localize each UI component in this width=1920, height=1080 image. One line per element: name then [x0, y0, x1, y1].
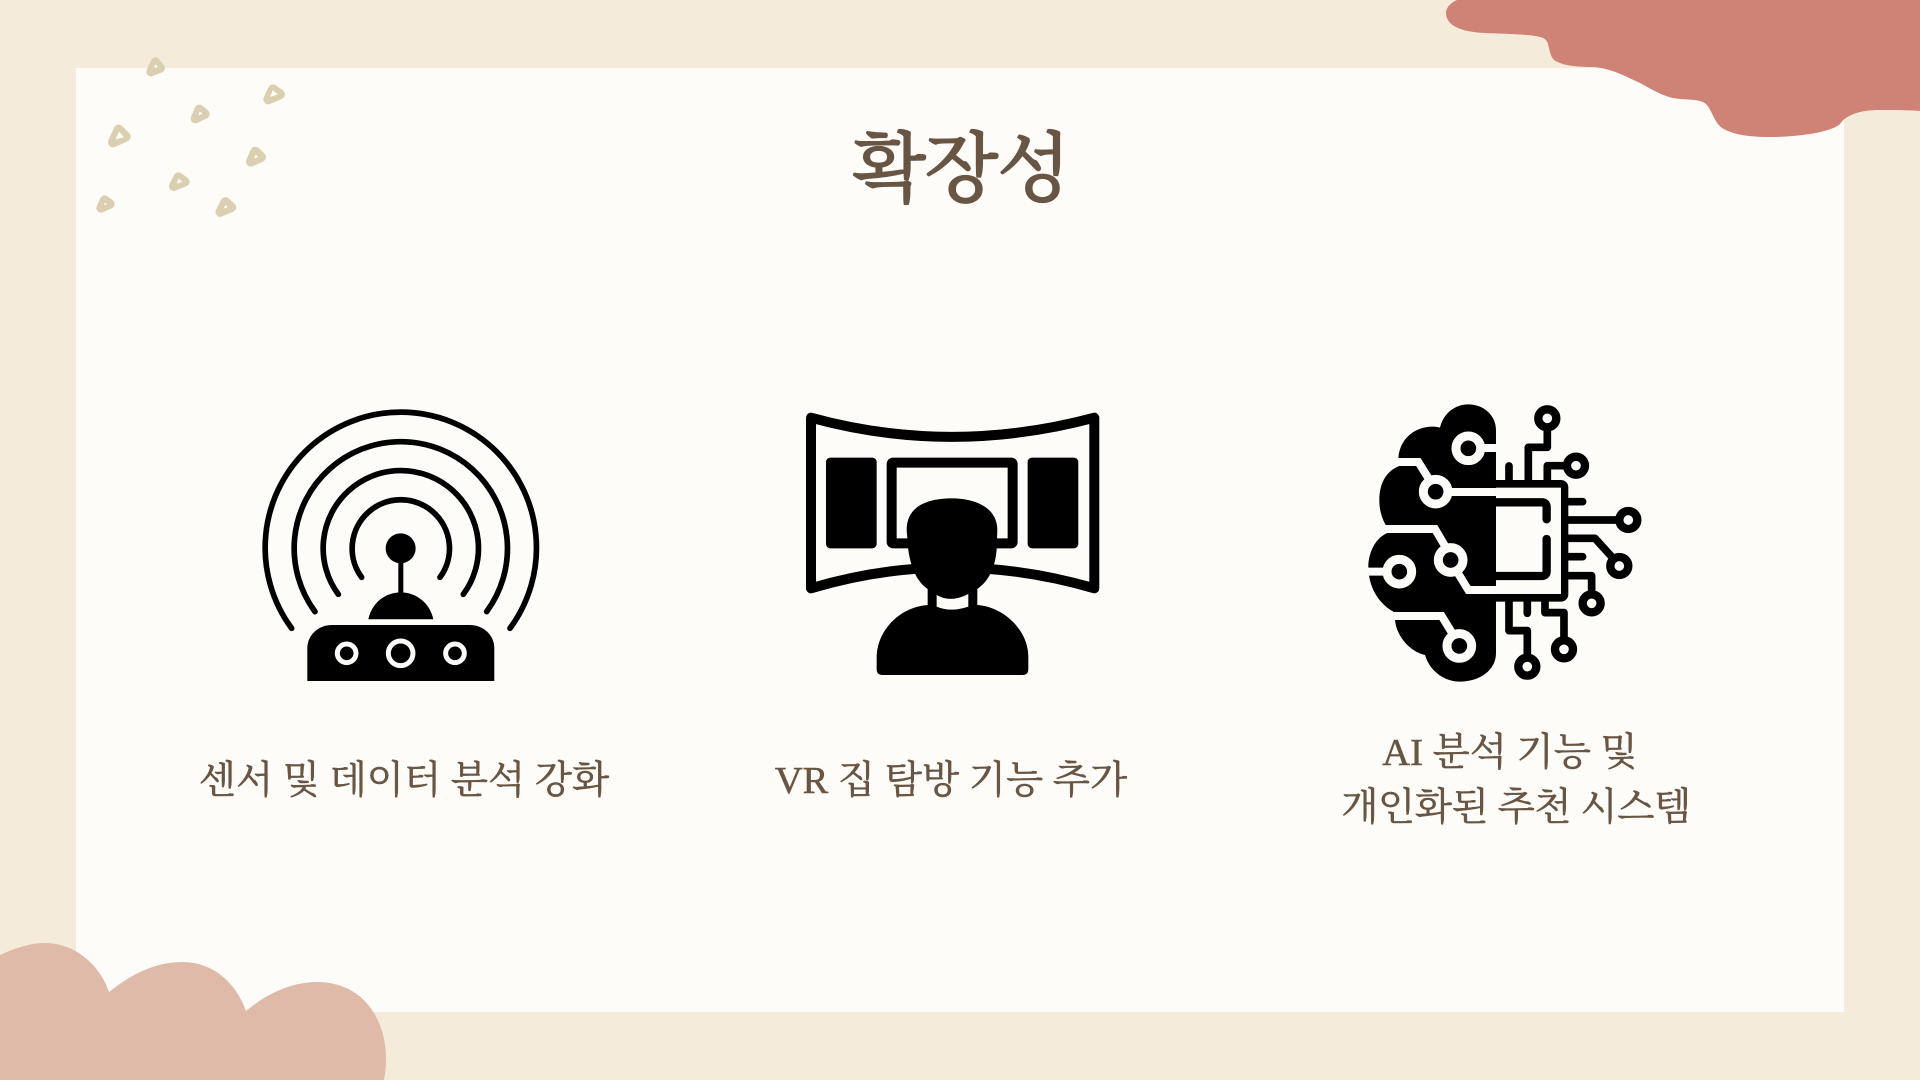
decoration: bottom-left cloud	[0, 943, 386, 1080]
circuit end nodes	[1518, 409, 1637, 676]
label: AI	[1341, 731, 1691, 829]
brain nodes	[1387, 436, 1481, 658]
brain silhouette	[1368, 404, 1496, 682]
screen panels	[826, 458, 1078, 548]
label: sensor: 센서 및 데이터 분석 강화	[199, 759, 609, 802]
title: 확장성	[852, 128, 1070, 212]
chip body	[1487, 480, 1568, 602]
decoration: top-right blob	[1446, 0, 1920, 137]
curved screen frame	[811, 418, 1094, 588]
decoration: scattered triangles	[101, 62, 280, 212]
person silhouette	[877, 498, 1028, 675]
signal arcs	[265, 412, 536, 628]
sensor base with lights	[307, 625, 494, 681]
label: AI: 개인화된 추천 시스템	[1341, 786, 1691, 829]
label: VR: VR 집 탐방 기능 추가	[775, 759, 1127, 802]
antenna	[368, 533, 433, 619]
icon: AI brain with circuit	[1367, 404, 1637, 682]
label: AI: AI 분석 기능 및	[1382, 731, 1638, 774]
icon: sensor with signal waves	[265, 412, 536, 681]
circuit pins	[1509, 430, 1617, 655]
icon: person in front of curved VR screen	[811, 418, 1094, 675]
white circuit traces in brain	[1367, 448, 1496, 635]
